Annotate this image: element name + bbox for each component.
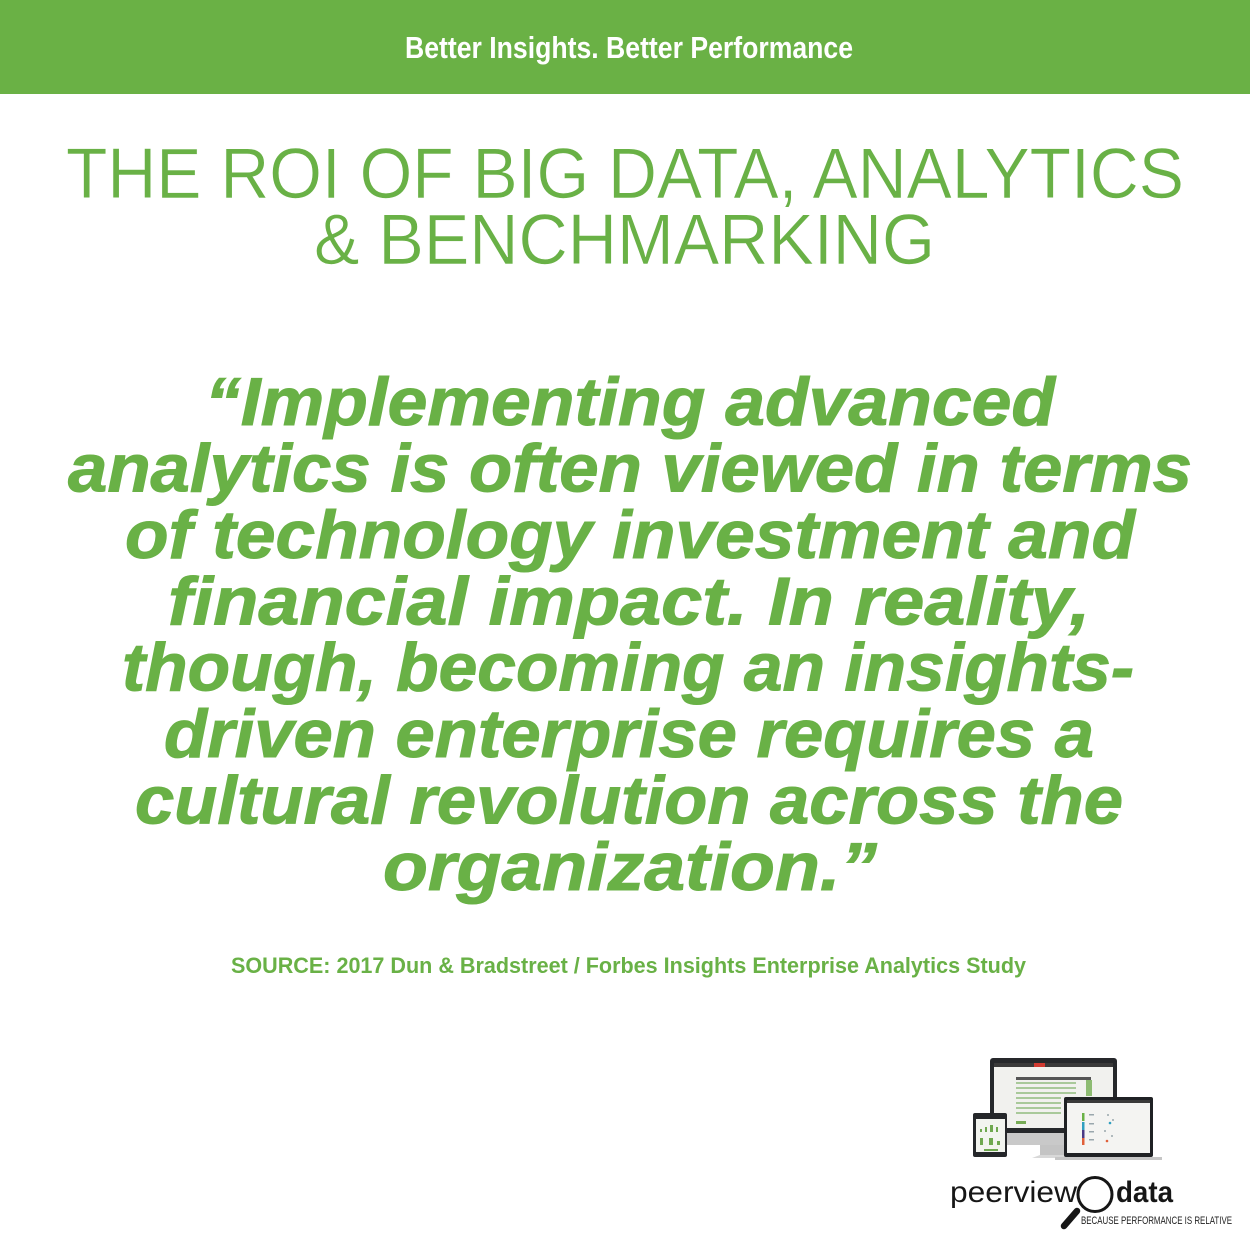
- title: & BENCHMARKING: [314, 201, 935, 280]
- header tagline: Better Insights. Better Performance: [405, 30, 853, 65]
- wordmark: data: data: [1116, 1176, 1173, 1209]
- title: THE ROI OF BIG DATA, ANALYTICS: [66, 135, 1184, 214]
- quote: of technology investment and: [125, 497, 1137, 573]
- source citation: SOURCE: 2017 Dun & Bradstreet / Forbes Insights Enterprise Analytics Study: [231, 953, 1027, 978]
- header banner: [0, 0, 1250, 94]
- title: [66, 135, 1184, 280]
- quote: analytics is often viewed in terms: [68, 430, 1192, 506]
- icon: tablet: [973, 1113, 1007, 1157]
- quote: cultural revolution across the: [135, 762, 1123, 838]
- icon: desktop monitor: [990, 1058, 1117, 1158]
- quote: financial impact. In reality,: [168, 563, 1090, 639]
- quote: “Implementing advanced: [205, 364, 1057, 440]
- quote: organization.”: [383, 829, 877, 905]
- quote: driven enterprise requires a: [164, 696, 1094, 772]
- icon: magnifying glass: [1064, 1178, 1112, 1226]
- wordmark: peerview: peerview: [950, 1176, 1077, 1209]
- quote: [68, 364, 1192, 905]
- quote: though, becoming an insights-: [122, 630, 1134, 706]
- icon: laptop: [1055, 1097, 1162, 1160]
- logo: peerview data: [950, 1058, 1232, 1227]
